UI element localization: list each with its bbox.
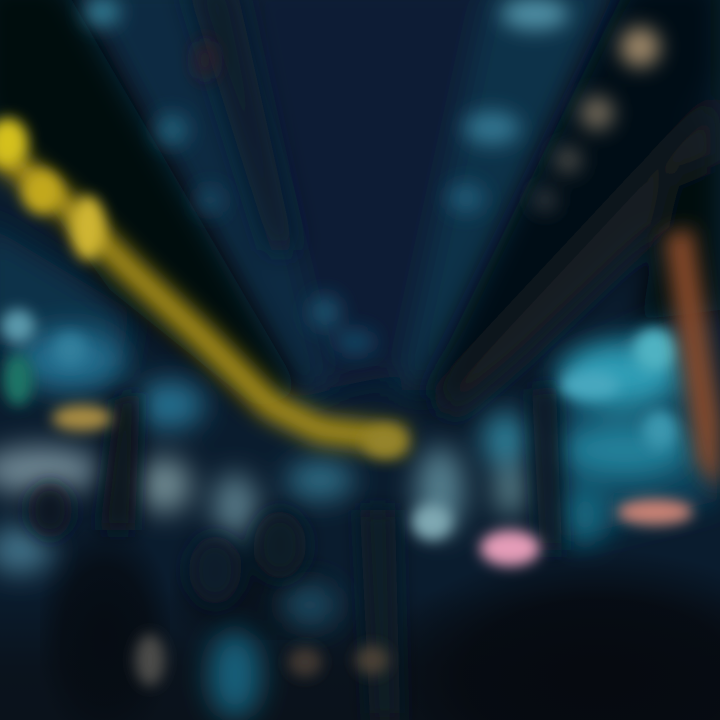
orange pillar: [665, 228, 720, 490]
yellow banner highlights: [0, 118, 407, 458]
dark pillars: [28, 385, 562, 720]
ceiling lights: [84, 0, 660, 354]
floor darkness: [0, 510, 720, 720]
crowd lights, left: [0, 328, 354, 719]
crowd lights, right: [416, 343, 690, 543]
yellow banner: [0, 145, 405, 440]
ceiling panels: [0, 0, 720, 540]
dark structural beams: [0, 0, 720, 420]
accent lights: [1, 309, 693, 686]
